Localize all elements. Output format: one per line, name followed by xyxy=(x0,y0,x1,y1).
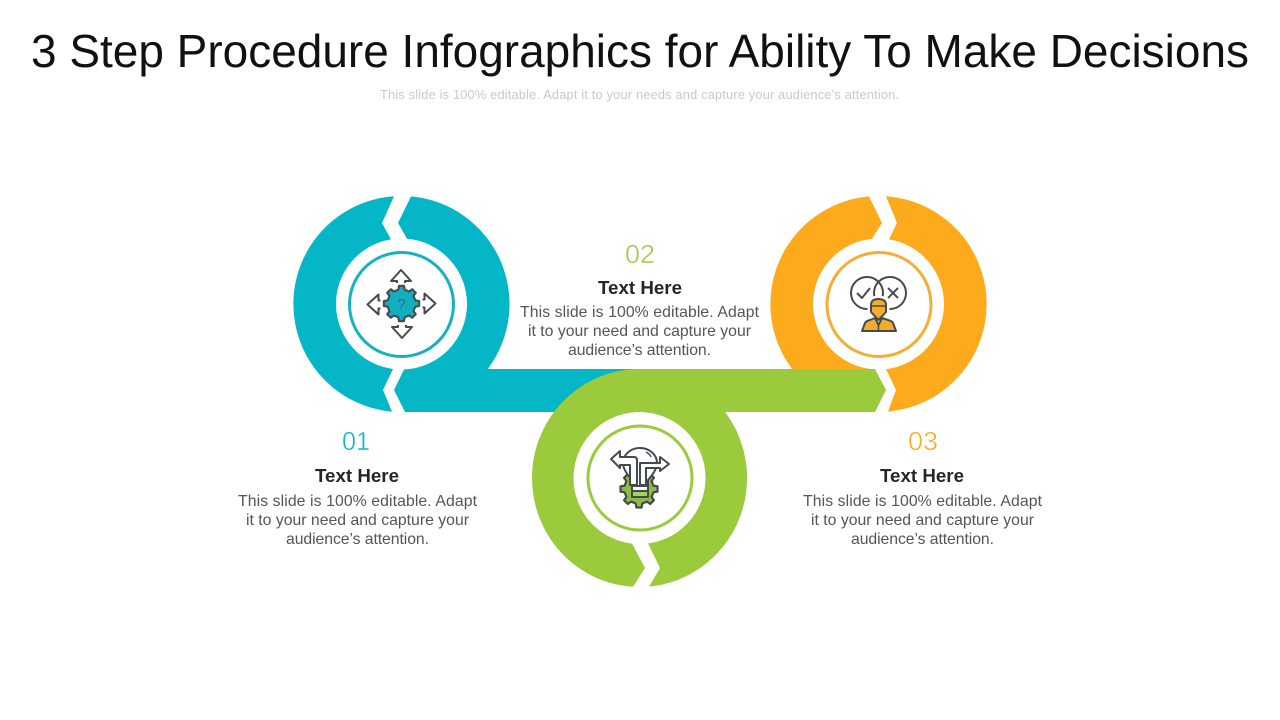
step 03 text: audience’s attention. xyxy=(851,531,994,548)
step 01 text: it to your need and capture your xyxy=(246,512,469,529)
step 02 text: 02 xyxy=(625,239,655,269)
step 02 text: Text Here xyxy=(598,278,682,298)
green loop shape xyxy=(532,369,886,587)
step 01 text: audience’s attention. xyxy=(286,531,429,548)
step 01 text: 01 xyxy=(342,426,370,456)
orange loop shape xyxy=(770,196,987,412)
step 03 text: This slide is 100% editable. Adapt xyxy=(803,493,1043,510)
step 03 text: Text Here xyxy=(880,466,964,486)
step 02 text: audience’s attention. xyxy=(568,342,711,359)
inner ring: green xyxy=(588,426,692,530)
step 02 text xyxy=(520,239,760,359)
icon: light bulb with gear and arrows xyxy=(611,448,669,508)
step 03 text: it to your need and capture your xyxy=(811,512,1034,529)
inner ring: orange xyxy=(827,252,931,356)
title: 3 Step Procedure Infographics for Ability To Make Decisions xyxy=(31,25,1249,77)
step 03 text: 03 xyxy=(908,426,938,456)
icon: gear with question mark and four arrows: ? xyxy=(397,296,406,313)
step 02 text: This slide is 100% editable. Adapt xyxy=(520,304,760,321)
step 01 text: Text Here xyxy=(315,466,399,486)
step 03 text xyxy=(803,426,1043,548)
teal loop shape xyxy=(293,196,660,412)
step 02 text: it to your need and capture your xyxy=(528,323,751,340)
step 01 text: This slide is 100% editable. Adapt xyxy=(238,493,478,510)
subtitle: This slide is 100% editable. Adapt it to your needs and capture your audience’s attention. xyxy=(380,87,899,102)
icon: gear with question mark and four arrows xyxy=(368,270,436,338)
icon: check and cross circles with person xyxy=(851,277,906,331)
inner ring: teal xyxy=(350,252,454,356)
step 01 text xyxy=(238,426,478,548)
